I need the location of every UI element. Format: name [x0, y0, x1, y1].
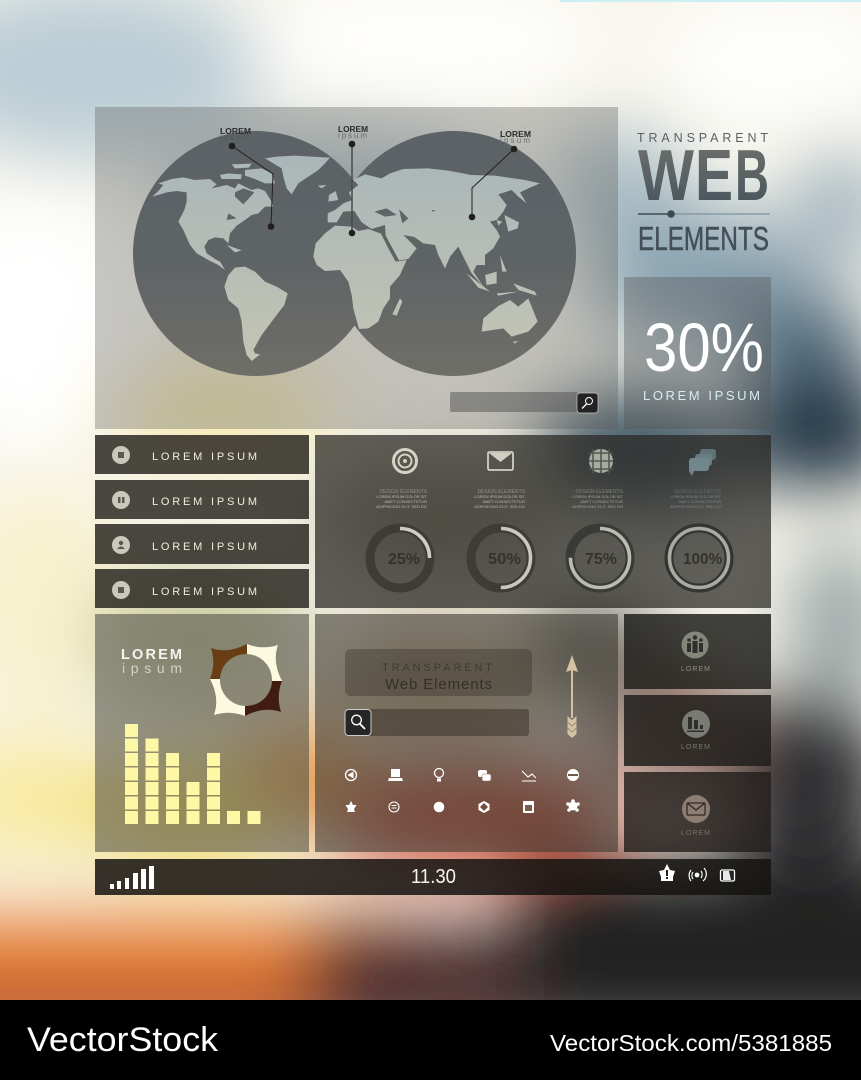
panel: lorem chart — [95, 614, 309, 852]
menu item 3 — [95, 524, 309, 564]
menu item 2: LOREM IPSUM — [152, 496, 257, 508]
title block: E — [695, 136, 733, 216]
globes — [133, 131, 576, 376]
menu item 4: LOREM IPSUM — [152, 586, 257, 598]
text column 1: AMET CONSECTETUR — [384, 499, 427, 504]
label box — [345, 649, 532, 696]
icon: alert star — [659, 864, 675, 881]
text column 1 — [376, 489, 428, 509]
text column 1: LOREM IPSUM DOLOR SIT — [376, 494, 428, 499]
panel: statistics — [624, 695, 771, 766]
icon: satellite — [689, 868, 706, 881]
pin: left: LOREM — [220, 127, 251, 136]
donut 75%: 75% — [585, 551, 617, 568]
text column 3: DESIGN ELEMENTS — [575, 489, 624, 495]
icon row 1 — [346, 768, 579, 782]
panel: mail — [624, 772, 771, 852]
text column 1: ADIPISICING ELIT, SED DO — [376, 504, 427, 509]
label box: TRANSPARENT — [382, 662, 492, 674]
text column 1: DESIGN ELEMENTS — [379, 489, 428, 495]
signal bars — [110, 866, 154, 889]
label box: Web Elements — [385, 676, 492, 693]
icon: window — [720, 870, 734, 881]
text column 2: ADIPISICING ELIT, SED DO — [474, 504, 525, 509]
pin: right: LOREM — [500, 130, 531, 139]
donut 25%: 25% — [388, 551, 420, 568]
panel: web elements — [315, 614, 618, 852]
text column 2: LOREM IPSUM DOLOR SIT — [474, 494, 526, 499]
footer: VectorStock watermark — [27, 1021, 832, 1059]
heading: ipsum — [122, 660, 182, 676]
footer: VectorStock watermark: VectorStock — [27, 1021, 219, 1059]
ornamental donut — [210, 644, 282, 716]
text column 4 — [670, 489, 722, 509]
pin: right: ipsum — [500, 136, 530, 145]
pin: left — [220, 127, 274, 230]
title block: W — [638, 136, 694, 216]
panel: team: LOREM — [681, 666, 710, 673]
panel: mail: LOREM — [681, 830, 710, 837]
panel: team — [624, 614, 771, 689]
heading — [121, 647, 182, 676]
menu item 1: LOREM IPSUM — [152, 451, 257, 463]
title block: TRANSPARENT — [637, 131, 768, 145]
donut 50% — [471, 528, 531, 588]
text column 4: LOREM IPSUM DOLOR SIT — [670, 494, 722, 499]
text column 3: ADIPISICING ELIT, SED DO — [572, 504, 623, 509]
icon: envelope — [488, 452, 513, 470]
arrow — [566, 655, 578, 738]
pin: middle: ipsum — [338, 131, 367, 140]
bar chart — [125, 724, 260, 824]
icon row 2 — [346, 799, 580, 813]
panel: 30 percent — [624, 277, 771, 429]
text column 3: LOREM IPSUM DOLOR SIT — [572, 494, 624, 499]
pin: middle: LOREM — [338, 125, 368, 134]
menu item 3: LOREM IPSUM — [152, 541, 257, 553]
text column 2 — [474, 489, 526, 509]
heading: LOREM — [121, 647, 182, 663]
text column 4: ADIPISICING ELIT, SED DO — [670, 504, 721, 509]
title block — [637, 131, 770, 258]
footer: VectorStock watermark: VectorStock.com/5381885 — [550, 1030, 832, 1056]
pin: right — [469, 130, 531, 220]
panel: world map — [95, 107, 618, 429]
search bar: map — [450, 392, 598, 413]
text column 4: AMET CONSECTETUR — [678, 499, 721, 504]
donut 25% — [370, 528, 430, 588]
text column 3: AMET CONSECTETUR — [580, 499, 623, 504]
panel: design elements and progress — [315, 435, 771, 608]
panel: 30 percent: 30% — [644, 309, 764, 386]
text column 2: DESIGN ELEMENTS — [477, 489, 526, 495]
menu list — [95, 435, 309, 608]
clock: 11.30 — [411, 866, 456, 888]
donut 75% — [570, 528, 630, 588]
continents — [152, 156, 540, 361]
pin: middle — [338, 125, 368, 236]
text column 4: DESIGN ELEMENTS — [673, 489, 722, 495]
icon: globe grid — [589, 449, 613, 473]
donut 50%: 50% — [488, 551, 521, 568]
panel: 30 percent: LOREM IPSUM — [643, 388, 760, 403]
icon: chat bubbles — [689, 449, 716, 476]
donut 100%: 100% — [683, 551, 722, 568]
status bar — [95, 859, 771, 895]
title block: ELEMENTS — [638, 221, 769, 258]
text column 3 — [572, 489, 624, 509]
donut 100% — [669, 528, 729, 588]
title block: B — [735, 136, 769, 216]
search bar — [345, 709, 529, 736]
menu item 1 — [95, 435, 309, 474]
menu item 4 — [95, 569, 309, 608]
icon: target — [394, 450, 416, 472]
panel: statistics: LOREM — [681, 744, 710, 751]
pin: left: ipsum — [220, 133, 250, 142]
menu item 2 — [95, 480, 309, 519]
text column 2: AMET CONSECTETUR — [482, 499, 525, 504]
